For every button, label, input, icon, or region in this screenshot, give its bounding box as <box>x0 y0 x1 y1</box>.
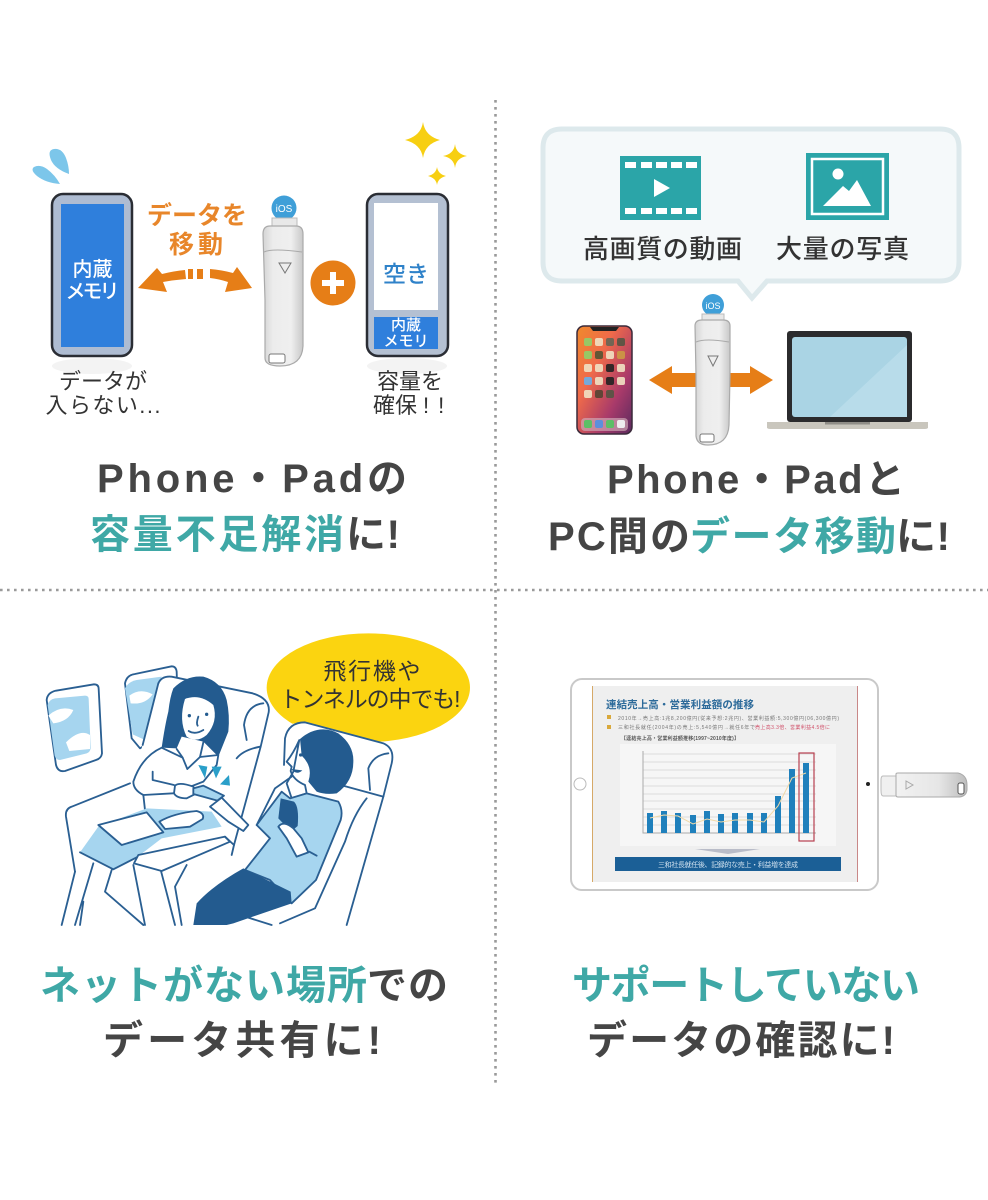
seat left <box>66 675 269 872</box>
heading <box>548 458 950 559</box>
icon: photo <box>806 153 889 220</box>
caption: secure capacity <box>373 369 453 418</box>
heading: に! <box>346 513 400 557</box>
woman right <box>193 729 353 925</box>
heading: Phone・Padと <box>607 458 905 502</box>
arrow: two-way curved <box>138 267 252 292</box>
label: move data: 移動 <box>169 231 223 259</box>
caption: no room: 入らない... <box>46 393 160 418</box>
icon: USB drive <box>695 294 730 445</box>
icon: laptop <box>767 331 928 429</box>
panel: offline sharing <box>40 633 470 1063</box>
icon: smartphone <box>577 326 632 434</box>
caption: no room <box>46 369 160 418</box>
caption: secure capacity: 確保 !! <box>373 393 453 418</box>
callout <box>543 129 959 298</box>
icon: plus <box>310 260 356 306</box>
label: move data <box>147 201 247 259</box>
center console <box>134 837 234 925</box>
screen: slide: 三和社長就任後、記録的な売上・利益増を達成 <box>658 860 798 869</box>
callout: speech bubble <box>267 633 470 742</box>
panel: data transfer <box>543 129 959 559</box>
label: move data: データを <box>147 201 247 230</box>
heading: 容量不足解消 <box>90 513 344 557</box>
screen: slide <box>592 686 858 882</box>
heading <box>40 964 448 1063</box>
illustration: airplane seats <box>47 633 470 925</box>
heading: データの確認に! <box>587 1018 895 1063</box>
icon: USB and sparkles <box>193 765 230 801</box>
label: photo: 大量の写真 <box>776 234 909 264</box>
icon: USB drive sideways <box>881 773 967 797</box>
screen: slide: 連結売上高・営業利益額の推移 <box>606 698 754 711</box>
window left <box>47 684 102 771</box>
callout text <box>280 658 460 712</box>
heading <box>90 457 407 557</box>
icon: phone with free space: 空き <box>383 261 429 287</box>
heading: Phone・Padの <box>97 457 407 501</box>
callout text: トンネルの中でも! <box>280 686 460 712</box>
heading: に! <box>896 515 950 559</box>
icon: USB drive: iOS <box>705 301 721 311</box>
screen: slide: 2010年→売上高:1兆8,200億円(従来予想:2兆円)、営業利益額:5,300億円(06,300億円) <box>618 715 839 722</box>
heading: データ共有に! <box>103 1018 381 1063</box>
skirt and tablet <box>62 808 222 925</box>
heading: PC間の <box>548 515 690 559</box>
screen: slide: 【連結売上高・営業利益額推移(1997~2010年度)】 <box>621 735 739 742</box>
icon: USB drive <box>263 196 303 366</box>
icon: USB drive: iOS <box>276 204 293 215</box>
caption: secure capacity: 容量を <box>377 369 443 394</box>
heading <box>572 964 920 1063</box>
icon: phone with free space <box>367 194 448 374</box>
icon: sweat drops <box>33 149 69 184</box>
label: video: 高画質の動画 <box>583 234 742 264</box>
woman left <box>133 676 229 810</box>
icon: sparkles <box>405 122 467 185</box>
heading: サポートしていない <box>572 964 920 1008</box>
icon: phone with free space: 内蔵 <box>391 317 421 334</box>
icon: tablet <box>571 679 878 890</box>
bar chart <box>620 744 836 846</box>
heading: ネットがない場所 <box>40 964 367 1008</box>
window right <box>125 666 178 748</box>
screen: slide: 三和社長就任(2004年)の売上:5,540億円→就任6年で <box>618 724 755 731</box>
panel: capacity shortage <box>33 122 467 557</box>
icon: phone with free space: メモリ <box>383 333 429 350</box>
heading: での <box>367 964 448 1008</box>
callout text: 飛行機や <box>324 658 420 684</box>
screen: slide: 売上高3.3倍、営業利益4.5倍に <box>755 724 830 731</box>
panel: unsupported data check <box>571 679 967 1063</box>
icon: video <box>620 156 701 220</box>
heading: データ移動 <box>690 514 896 559</box>
arrow: two-way <box>649 366 773 394</box>
icon: full phone: 内蔵 <box>72 258 112 281</box>
icon: full phone <box>52 194 132 374</box>
icon: full phone: メモリ <box>66 281 120 303</box>
seat right <box>237 722 393 925</box>
caption: no room: データが <box>59 369 147 394</box>
